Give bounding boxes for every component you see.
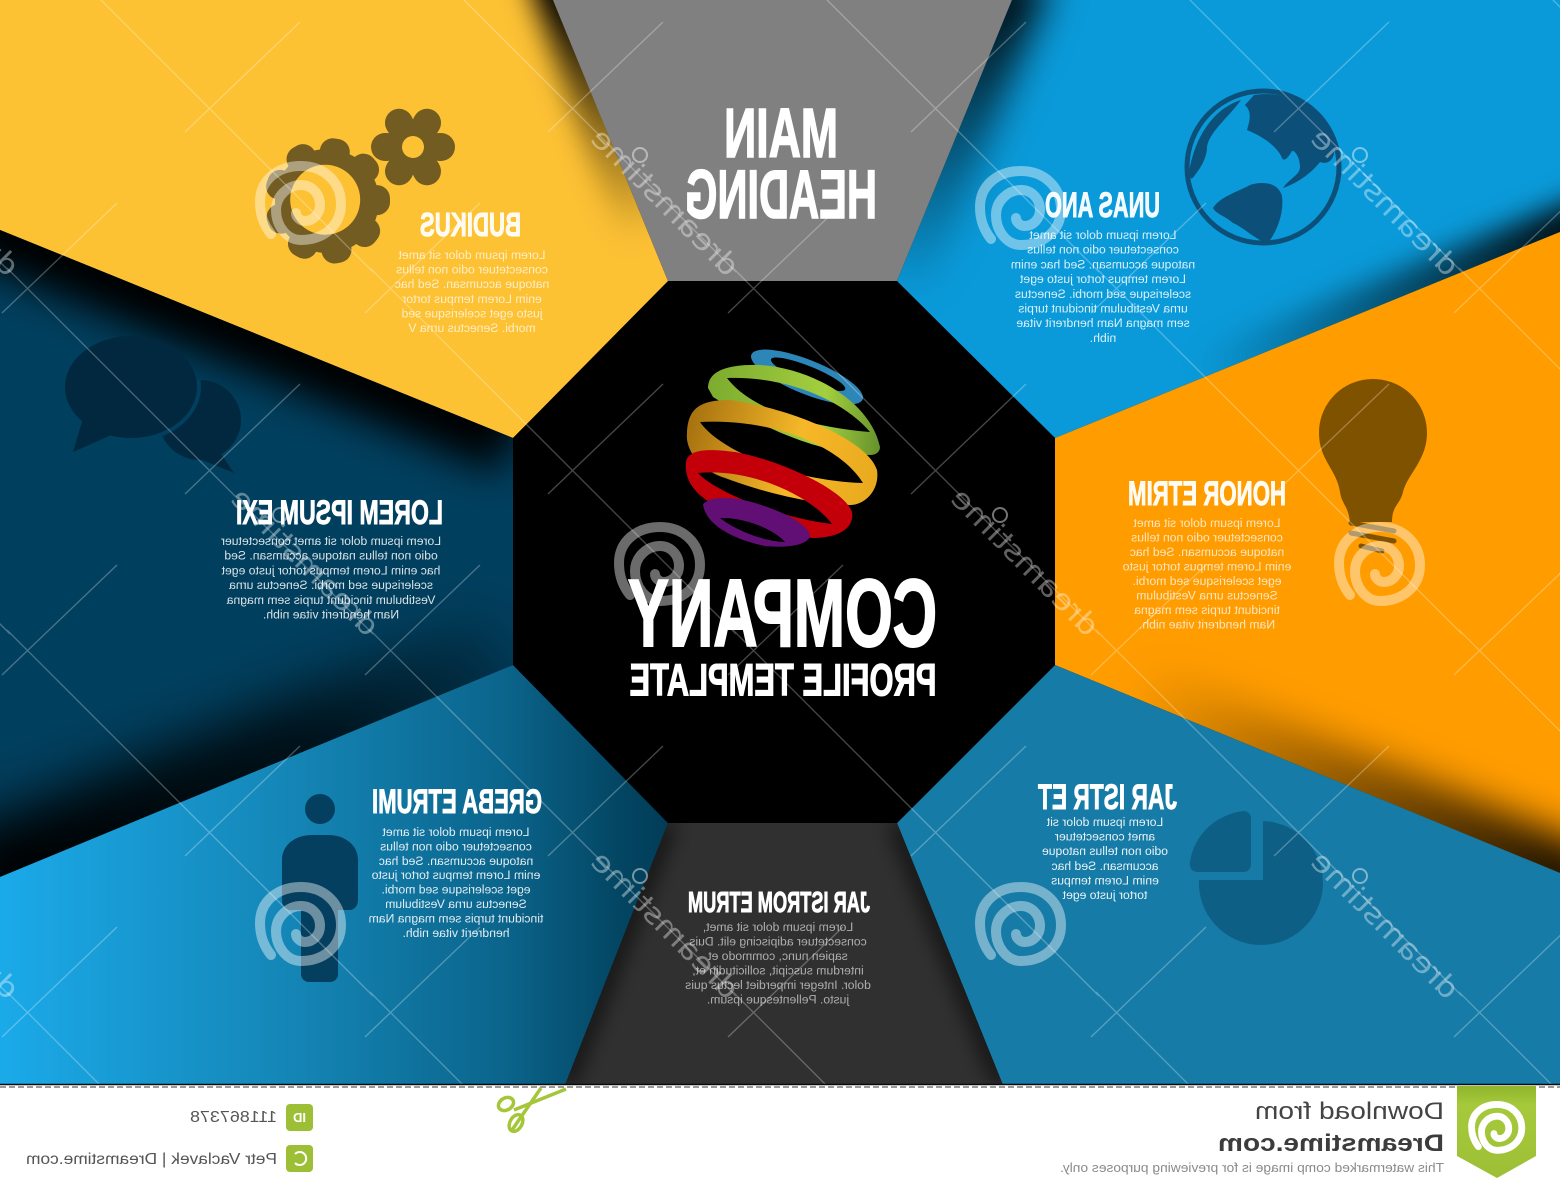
text block: Honor Etrim: eget scelerisque sed morbi. bbox=[1132, 574, 1282, 588]
text block: Budikus: consectetuer odio non tellus bbox=[396, 263, 548, 277]
text block: Honor Etrim: enim Lorem tempus tortor justo bbox=[1122, 560, 1291, 574]
watermark: dreamstime wordmarks: dreamstime bbox=[584, 121, 746, 283]
text block: Unas Ano: scelerisque sed morbi. Senectus bbox=[1015, 287, 1191, 301]
text block: Lorem Ipsum Exi: scelerisque sed morbi. Senectus urna bbox=[229, 578, 433, 592]
text block: Greba Etrumi: eget scelerisque sed morbi. bbox=[381, 883, 531, 897]
text block: Budikus: Lorem ipsum dolor sit amet bbox=[398, 248, 545, 262]
text block: Lorem Ipsum Exi: odio non tellus natoque accumsan. Sed bbox=[224, 549, 438, 563]
panel: blue bottom-left bbox=[0, 665, 668, 1085]
icon: light bulb bbox=[1319, 379, 1427, 551]
footer: dreamstime ribbon logo bbox=[1457, 1086, 1536, 1178]
text block: Unas Ano: UNAS ANO bbox=[1045, 186, 1160, 225]
panel: grey top bbox=[553, 0, 1012, 281]
text block: Lorem Ipsum Exi: Vestibulum tincidunt turpis sem magna bbox=[226, 593, 435, 607]
text block: Jar Istrom Etrum: interdum suscipit, sollicitudin et, bbox=[692, 964, 864, 978]
watermark: spirals bbox=[260, 166, 1420, 961]
text block: Jar Istr Et: enim Lorem tempus bbox=[1051, 873, 1159, 887]
text block: Jar Istr Et: amet consectetuer bbox=[1055, 830, 1155, 844]
footer: download text: Download from bbox=[1255, 1098, 1444, 1125]
text block: Jar Istr Et: JAR ISTR ET bbox=[1038, 778, 1177, 817]
footer: image ID bbox=[190, 1104, 313, 1131]
text block: Greba Etrumi: enim Lorem tempus tortor justo bbox=[371, 868, 540, 882]
text block: Budikus: natoque accumsan. Sed hac bbox=[395, 277, 549, 291]
panel: dark bottom bbox=[565, 823, 1003, 1085]
watermark: dreamstime wordmarks: dreamstime bbox=[224, 481, 386, 643]
text block: Honor Etrim: Senectus urna Vestibulum bbox=[1136, 588, 1278, 602]
text block: Jar Istrom Etrum bbox=[685, 887, 871, 1006]
text block: Unas Ano: urna Vestibulum tincidunt turpis bbox=[1018, 302, 1188, 316]
icon: scissors bbox=[496, 1088, 566, 1134]
text block: Budikus: BUDIKUS bbox=[420, 206, 521, 243]
text block: Honor Etrim: natoque accumsan. Sed hac bbox=[1130, 545, 1284, 559]
heading: Main Heading bbox=[685, 94, 877, 233]
panel: black centre octagon bbox=[513, 282, 1055, 823]
icon: globe bbox=[1187, 91, 1339, 243]
text block: Greba Etrumi: hendrerit vitae nibh. bbox=[402, 926, 510, 940]
text block: Lorem Ipsum Exi: LOREM IPSUM EXI bbox=[236, 494, 443, 532]
footer: download text bbox=[1060, 1098, 1444, 1175]
text block: Budikus: morbi. Senectus urna V bbox=[407, 321, 536, 335]
watermark: dreamstime wordmarks: dreamstime bbox=[944, 481, 1106, 643]
text block: Unas Ano: Lorem tempus tortor justo eget bbox=[1019, 272, 1186, 286]
text block: Budikus: justo eget scelerisque sed bbox=[402, 306, 543, 320]
text block: Greba Etrumi: tincidunt turpis sem magna Nam bbox=[369, 911, 543, 925]
icon: pie chart bbox=[1190, 811, 1323, 945]
panel: blue top-right bbox=[897, 0, 1560, 438]
text block: Unas Ano: Lorem ipsum dolor sit amet bbox=[1029, 228, 1176, 242]
text block: Jar Istr Et bbox=[1038, 778, 1177, 902]
logo: ribbon sphere bbox=[686, 339, 880, 547]
watermark: dreamstime wordmarks: dreamstime bbox=[584, 844, 746, 1006]
icon: gears bbox=[253, 89, 472, 275]
footer: download text: Dreamstime.com bbox=[1218, 1130, 1444, 1157]
text block: Honor Etrim: HONOR ETRIM bbox=[1128, 475, 1286, 513]
text block: Jar Istr Et: tortor justo eget bbox=[1062, 888, 1147, 902]
text block: Lorem Ipsum Exi: Nam hendrerit vitae nibh. bbox=[263, 608, 399, 622]
text block: Greba Etrumi: GREBA ETRUMI bbox=[372, 783, 542, 821]
text block: Lorem Ipsum Exi bbox=[221, 494, 443, 622]
panel: yellow top-left bbox=[0, 0, 668, 438]
watermark: dreamstime wordmarks: dreamstime bbox=[1304, 844, 1466, 1006]
footer: white strip bbox=[0, 1084, 1560, 1192]
text block: Greba Etrumi: natoque accumsan. Sed hac bbox=[379, 854, 533, 868]
icon: speech bubbles bbox=[61, 332, 241, 473]
heading: Company Profile Template: PROFILE TEMPLATE bbox=[630, 654, 936, 706]
text block: Jar Istr Et: Lorem ipsum dolor sit bbox=[1046, 815, 1163, 829]
text block: Unas Ano: natoque accumsan. Sed hac enim bbox=[1011, 257, 1195, 271]
text block: Jar Istrom Etrum: Lorem ipsum dolor sit amet, bbox=[703, 920, 853, 934]
footer: image ID: 111867378 bbox=[190, 1109, 277, 1126]
footer: image ID: ID bbox=[293, 1110, 306, 1125]
text block: Honor Etrim: Lorem ipsum dolor sit amet bbox=[1133, 516, 1280, 530]
icon: person bbox=[282, 794, 358, 982]
text block: Honor Etrim: consectetuer odio non tellus bbox=[1131, 530, 1283, 544]
text block: Jar Istr Et: odio non tellus natoque bbox=[1042, 844, 1168, 858]
text block: Jar Istrom Etrum: JAR ISTROM ETRUM bbox=[688, 887, 870, 919]
text block: Budikus bbox=[395, 206, 549, 335]
text block: Greba Etrumi bbox=[369, 783, 543, 940]
text block: Unas Ano: nibh. bbox=[1090, 331, 1116, 345]
watermark: dreamstime wordmarks bbox=[0, 121, 1466, 1006]
text block: Jar Istrom Etrum: sapien nunc, commodo et bbox=[708, 949, 848, 963]
footer: author credit: Petr Vaclavek | Dreamstime.com bbox=[26, 1151, 277, 1168]
footer: download text: This watermarked comp image is for previewing purposes only. bbox=[1060, 1161, 1444, 1175]
heading: Company Profile Template bbox=[628, 560, 937, 706]
text block: Greba Etrumi: Lorem ipsum dolor sit amet bbox=[382, 825, 529, 839]
panel: blue bottom-right bbox=[897, 665, 1560, 1085]
text block: Honor Etrim: tincidunt turpis sem magna bbox=[1134, 603, 1280, 617]
text block: Budikus: enim Lorem tempus tortor bbox=[402, 292, 542, 306]
heading: Company Profile Template: COMPANY bbox=[628, 560, 937, 667]
heading: Main Heading: MAIN bbox=[724, 94, 838, 172]
text block: Lorem Ipsum Exi: Lorem ipsum dolor sit amet consectetuer bbox=[221, 534, 441, 548]
text block: Greba Etrumi: Senectus urna Vestibulum bbox=[385, 897, 527, 911]
text block: Honor Etrim: Nam hendrerit vitae nibh. bbox=[1139, 618, 1275, 632]
text block: Greba Etrumi: consectetuer odio non tellus bbox=[380, 839, 532, 853]
text block: Honor Etrim bbox=[1122, 475, 1291, 632]
watermark: dreamstime wordmarks: dreamstime bbox=[1304, 121, 1466, 283]
heading: Main Heading: HEADING bbox=[685, 156, 877, 233]
text block: Unas Ano bbox=[1011, 186, 1195, 345]
text block: Jar Istrom Etrum: consectetuer adipiscing elit. Duis bbox=[689, 934, 867, 948]
text block: Unas Ano: sem magna Nam hendrerit vitae bbox=[1016, 316, 1190, 330]
text block: Unas Ano: consectetuer odio non tellus bbox=[1027, 243, 1179, 257]
panel: orange right bbox=[1055, 232, 1560, 890]
footer: author credit bbox=[26, 1145, 313, 1172]
panel: navy left bbox=[0, 214, 513, 893]
text block: Jar Istr Et: accumsan. Sed hac bbox=[1051, 859, 1159, 873]
text block: Jar Istrom Etrum: dolor. Integer imperdiet lectus quis bbox=[685, 978, 871, 992]
text block: Lorem Ipsum Exi: hac enim Lorem tempus tortor justo eget bbox=[221, 563, 440, 577]
text block: Jar Istrom Etrum: justo. Pellentesque ipsum. bbox=[707, 992, 850, 1006]
